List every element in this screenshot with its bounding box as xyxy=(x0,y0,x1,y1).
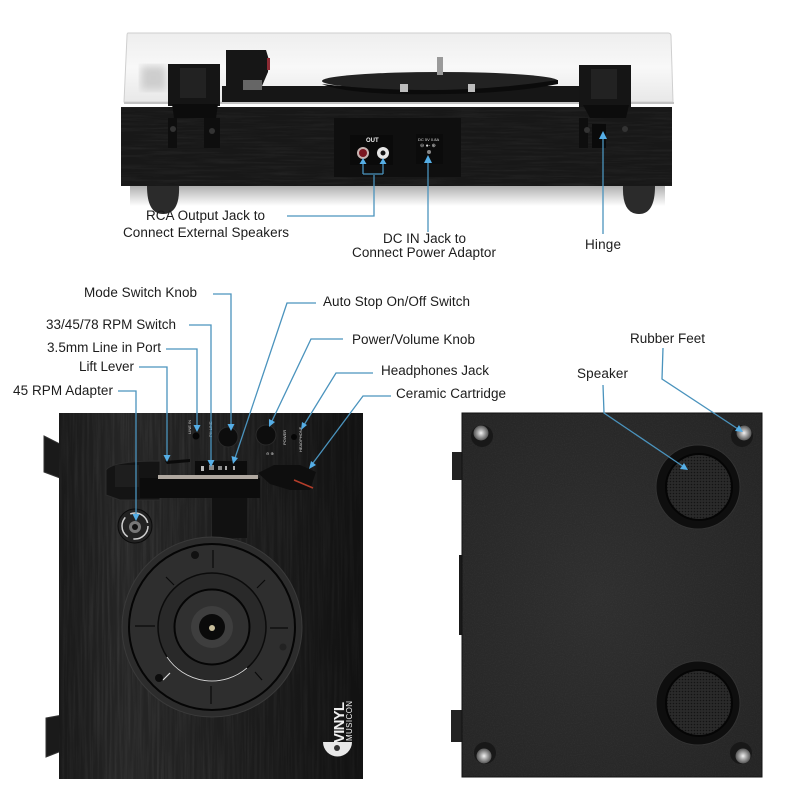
connector plate xyxy=(334,118,461,177)
platter xyxy=(322,57,558,94)
arrow: ceramic cartridge xyxy=(309,396,391,469)
arrow: lift lever xyxy=(139,367,170,462)
wooden base xyxy=(121,107,672,186)
arrow: headphones jack xyxy=(301,373,373,430)
floor shadow xyxy=(130,186,665,206)
text: DC IN label: Connect Power Adaptor xyxy=(352,245,496,260)
lift lever xyxy=(165,459,190,464)
wood top surface xyxy=(59,413,363,779)
mode switch knob xyxy=(218,427,238,447)
arrow: power volume knob xyxy=(269,339,343,427)
blurred controls inside the cover xyxy=(141,66,166,90)
speaker bottom xyxy=(656,661,740,745)
side strip xyxy=(459,555,462,635)
text: Rubber Feet: Rubber Feet xyxy=(630,331,705,346)
text: hinge label: Hinge xyxy=(585,237,621,252)
DC jack xyxy=(427,150,431,154)
dust cover xyxy=(124,33,673,102)
headphones jack xyxy=(291,434,297,440)
logo: Vinyl Musicon: MUSICON xyxy=(345,701,354,741)
arrow: auto stop switch xyxy=(232,303,316,464)
left clip top xyxy=(44,436,60,478)
control printing: LINE IN xyxy=(187,420,192,434)
text: 45 RPM Adapter: 45 RPM Adapter xyxy=(13,383,114,398)
text: OUT: OUT xyxy=(366,138,379,144)
arrow: 3.5mm line in port xyxy=(166,349,200,432)
platter xyxy=(122,537,302,717)
text: Speaker: Speaker xyxy=(577,366,628,381)
right foot xyxy=(623,186,655,214)
rubber foot bottom right xyxy=(730,742,752,764)
text: RCA output jack label: RCA Output Jack to xyxy=(146,208,265,223)
arrow: hinge xyxy=(599,131,607,234)
control printing: POWER xyxy=(282,430,287,445)
side knob bottom xyxy=(451,710,462,742)
arrow: RCA output jack xyxy=(287,158,386,216)
text: 33/45/78 RPM Switch: 33/45/78 RPM Switch xyxy=(46,317,176,332)
arrow: mode switch knob xyxy=(213,294,234,431)
text: DC IN label: DC IN Jack to xyxy=(383,231,466,246)
text: Headphones Jack: Headphones Jack xyxy=(381,363,489,378)
text: Power/Volume Knob: Power/Volume Knob xyxy=(352,332,475,347)
left foot xyxy=(147,186,179,214)
switch panel xyxy=(195,461,247,491)
left hinge xyxy=(168,64,220,148)
text: Mode Switch Knob: Mode Switch Knob xyxy=(84,285,197,300)
panel: rear view of turntable xyxy=(121,33,674,260)
arrow: 33/45/78 RPM switch xyxy=(189,325,214,467)
red RCA jack xyxy=(357,147,369,159)
text: RCA output jack label xyxy=(123,208,289,240)
logo: Vinyl Musicon: VINYL xyxy=(331,702,348,743)
text: Lift Lever: Lift Lever xyxy=(79,359,134,374)
left clip bottom xyxy=(46,714,69,757)
arrow: 45 RPM adapter xyxy=(118,391,140,521)
rubber foot bottom left xyxy=(474,742,496,764)
control printing: ⊖ ⊕ xyxy=(266,451,274,456)
text: RCA output jack label: Connect External Speakers xyxy=(123,225,289,240)
arrow: DC IN jack xyxy=(424,155,432,232)
panel: bottom view of turntable xyxy=(451,331,762,777)
text: Ceramic Cartridge: Ceramic Cartridge xyxy=(396,386,506,401)
logo: Vinyl Musicon xyxy=(323,701,354,756)
text: DC rating: DC 5V 0.8A xyxy=(418,137,439,142)
panel: top view of turntable xyxy=(13,285,506,779)
control printing: HEADPHONE xyxy=(298,426,303,452)
text: Auto Stop On/Off Switch: Auto Stop On/Off Switch xyxy=(323,294,470,309)
side knob top xyxy=(452,452,462,480)
tonearm head xyxy=(226,50,270,90)
speaker top xyxy=(656,445,740,529)
control printing: PH LINE xyxy=(208,421,213,437)
arrow: rubber feet xyxy=(662,348,743,432)
control printing xyxy=(187,420,303,456)
underside surface xyxy=(462,413,762,777)
icon: polarity: ⊖ ●- ⊕ xyxy=(420,143,436,149)
tonearm bracket xyxy=(212,490,247,538)
light seam line xyxy=(124,102,674,104)
arrow: speaker xyxy=(603,385,688,470)
45 RPM adapter xyxy=(118,509,152,543)
rubber foot top left xyxy=(471,425,493,447)
rubber foot top right xyxy=(731,425,753,447)
tonearm xyxy=(106,461,316,500)
line in port xyxy=(192,432,200,440)
white RCA jack xyxy=(377,147,389,159)
power volume knob xyxy=(256,425,276,445)
right hinge xyxy=(579,65,631,148)
turntable deck behind cover xyxy=(222,86,580,104)
platter tick marks xyxy=(135,550,288,704)
text: DC IN label xyxy=(352,231,496,260)
text: 3.5mm Line in Port: 3.5mm Line in Port xyxy=(47,340,161,355)
